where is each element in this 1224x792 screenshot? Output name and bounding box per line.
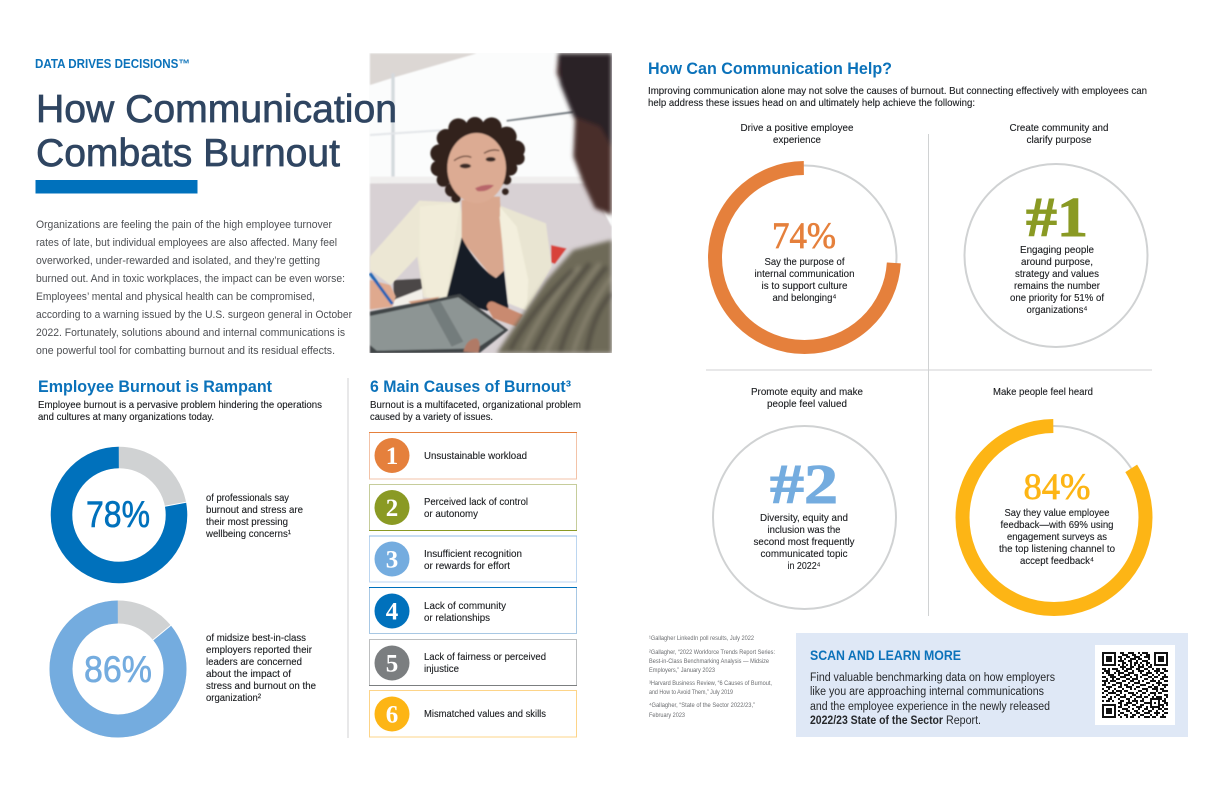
quadrant: community and purpose: one priority for 51% of bbox=[1010, 292, 1104, 304]
callout text: Report. bbox=[946, 715, 981, 727]
burnout subtext: Employee burnout is a pervasive problem hindering the operations bbox=[38, 399, 322, 411]
callout heading: SCAN AND LEARN MORE bbox=[810, 648, 961, 663]
quadrant: community and purpose: organizations⁴ bbox=[1026, 304, 1088, 316]
footnotes: Employers,” January 2023 bbox=[649, 667, 715, 674]
intro paragraph: 2022. Fortunately, solutions abound and internal communications is bbox=[36, 327, 345, 339]
causes subtext: Burnout is a multifaceted, organizational problem bbox=[370, 399, 581, 411]
quadrant: feel heard: the top listening channel to bbox=[999, 543, 1115, 555]
cause 2 bbox=[369, 484, 577, 530]
donut chart: 86% bbox=[61, 612, 175, 726]
quadrant: feel heard: Say they value employee bbox=[1004, 507, 1110, 519]
stat text: 86%: organization² bbox=[206, 692, 261, 704]
cause 3 bbox=[369, 536, 577, 582]
quadrant: feel heard: feedback—with 69% using bbox=[1000, 519, 1114, 531]
cause 5: Lack of fairness or perceived bbox=[424, 651, 546, 663]
quadrant: positive employee experience: and belonging⁴ bbox=[772, 292, 836, 304]
quadrant: positive employee experience: Drive a positive employee bbox=[740, 122, 854, 134]
quadrant: equity: inclusion was the bbox=[768, 524, 841, 536]
title bbox=[36, 88, 397, 175]
donut chart: 78% bbox=[62, 458, 188, 572]
stat text: 78%: wellbeing concerns¹ bbox=[205, 528, 291, 540]
cause 6: Mismatched values and skills bbox=[424, 708, 546, 720]
quadrant: equity: communicated topic bbox=[760, 548, 848, 560]
cause 2: or autonomy bbox=[424, 508, 479, 520]
intro paragraph: burned out. And in toxic workplaces, the impact can be even worse: bbox=[36, 273, 345, 285]
quadrant: community and purpose: #1 bbox=[1026, 187, 1088, 249]
footnotes: ¹Gallagher LinkedIn poll results, July 2022 bbox=[649, 635, 754, 642]
stat text: 78% bbox=[205, 492, 303, 540]
intro paragraph: according to a warning issued by the U.S. surgeon general in October bbox=[36, 309, 352, 321]
heading: 6 Main Causes of Burnout: 6 Main Causes of Burnout³ bbox=[370, 377, 571, 396]
quadrant: feel heard: Make people feel heard bbox=[993, 386, 1093, 398]
quadrant: equity: #2 bbox=[770, 454, 838, 516]
cause 1: 1 bbox=[386, 443, 398, 470]
quadrant: equity: people feel valued bbox=[767, 398, 847, 410]
cause 4 bbox=[369, 588, 577, 634]
quadrant: community and purpose: remains the number bbox=[1014, 280, 1100, 292]
donut chart: 78%: 78% bbox=[86, 494, 150, 535]
intro paragraph: one powerful tool for combatting burnout and its residual effects. bbox=[36, 345, 335, 357]
intro paragraph: overworked, under-rewarded and isolated, and they’re getting bbox=[36, 255, 320, 267]
cause 1 bbox=[369, 432, 577, 479]
eyebrow: Data Drives Decisions: DATA DRIVES DECISIONS™ bbox=[35, 57, 190, 71]
callout text: Find valuable benchmarking data on how employers bbox=[810, 672, 1055, 684]
stat text: 86%: about the impact of bbox=[206, 668, 291, 680]
title: How Communication bbox=[36, 88, 397, 131]
quadrant: community and purpose: strategy and values bbox=[1015, 268, 1099, 280]
donut chart: 86%: 86% bbox=[84, 649, 152, 690]
heading: Employee Burnout is Rampant: Employee Burnout is Rampant bbox=[38, 377, 272, 396]
quadrant: community and purpose: Engaging people bbox=[1020, 244, 1094, 256]
stat text: 78%: of professionals say bbox=[206, 492, 290, 504]
quadrant: equity: second most frequently bbox=[754, 536, 855, 548]
stat text: 86%: stress and burnout on the bbox=[206, 680, 316, 692]
cause 6 bbox=[370, 690, 576, 737]
heading: How Can Communication Help?: How Can Communication Help? bbox=[648, 59, 892, 78]
title: Combats Burnout bbox=[36, 132, 340, 175]
right column intro bbox=[648, 85, 1147, 109]
cause 5: injustice bbox=[424, 663, 459, 675]
quadrant: community and purpose bbox=[964, 122, 1148, 347]
footnotes: ²Gallagher, “2022 Workforce Trends Report Series: bbox=[649, 649, 775, 656]
causes subtext: caused by a variety of issues. bbox=[370, 411, 493, 423]
photo: woman in meeting with colleague bbox=[369, 53, 612, 353]
right column intro: help address these issues head on and ultimately help achieve the following: bbox=[648, 97, 975, 109]
stat text: 86% bbox=[206, 632, 316, 704]
ring: #2 bbox=[713, 426, 896, 609]
quadrant: positive employee experience: internal communication bbox=[754, 268, 855, 280]
cause 6: 6 bbox=[386, 702, 398, 728]
stat text: 86%: of midsize best-in-class bbox=[206, 632, 306, 644]
cause 3: or rewards for effort bbox=[424, 560, 510, 572]
quadrant: positive employee experience: 74% bbox=[772, 216, 836, 257]
quadrant: feel heard: engagement surveys as bbox=[1007, 531, 1107, 543]
cause 4: Lack of community bbox=[424, 600, 507, 612]
quadrant: community and purpose: around purpose, bbox=[1021, 256, 1093, 268]
QR code bbox=[1095, 645, 1175, 725]
cause 2: Perceived lack of control bbox=[424, 496, 528, 508]
quadrant: community and purpose: clarify purpose bbox=[1026, 134, 1092, 146]
footnotes bbox=[649, 635, 775, 719]
burnout subtext: and cultures at many organizations today. bbox=[38, 411, 214, 423]
ring: #1 bbox=[964, 164, 1148, 347]
causes subtext bbox=[370, 399, 581, 423]
footnotes: and How to Avoid Them,” July 2019 bbox=[649, 689, 733, 696]
tablet bbox=[370, 294, 508, 353]
callout text bbox=[810, 672, 1055, 727]
quadrant: feel heard: accept feedback⁴ bbox=[1020, 555, 1094, 567]
cause 3: 3 bbox=[386, 546, 398, 574]
intro paragraph bbox=[36, 219, 352, 357]
stat text: 78%: burnout and stress are bbox=[206, 504, 303, 516]
intro paragraph: rates of late, but individual employees are also affected. Many feel bbox=[36, 237, 337, 249]
quadrant: positive employee experience: is to support culture bbox=[762, 280, 848, 292]
quadrant: equity: Diversity, equity and bbox=[760, 512, 848, 524]
cause 4: or relationships bbox=[424, 612, 490, 624]
intro paragraph: Organizations are feeling the pain of the high employee turnover bbox=[36, 219, 332, 231]
woman bbox=[370, 201, 466, 298]
quadrant: feel heard: 84% bbox=[1024, 467, 1090, 508]
cause 4: 4 bbox=[386, 598, 399, 626]
stat text: 78%: their most pressing bbox=[206, 516, 288, 528]
ring chart: 84% bbox=[962, 426, 1146, 609]
intro paragraph: Employees’ mental and physical health can be compromised, bbox=[36, 291, 315, 303]
quadrant: equity: in 2022⁴ bbox=[788, 560, 820, 572]
quadrant: positive employee experience bbox=[712, 122, 896, 350]
cause 3: Insufficient recognition bbox=[424, 548, 522, 560]
quadrant: community and purpose: Create community and bbox=[1010, 122, 1109, 134]
stat text: 86%: leaders are concerned bbox=[206, 656, 302, 668]
quadrant: positive employee experience: Say the purpose of bbox=[764, 256, 845, 268]
footnotes: February 2023 bbox=[649, 712, 685, 719]
panel: scan and learn more bbox=[796, 633, 1188, 737]
cause 1: Unsustainable workload bbox=[424, 450, 527, 462]
footnotes: ³Harvard Business Review, “6 Causes of Burnout, bbox=[649, 680, 772, 687]
callout text: like you are approaching internal communications bbox=[810, 686, 1044, 698]
quadrant: equity: Promote equity and make bbox=[751, 386, 863, 398]
callout text: 2022/23 State of the Sector bbox=[810, 715, 943, 727]
footnotes: Best-in-Class Benchmarking Analysis — Midsize bbox=[649, 658, 769, 665]
stat text: 86%: employers reported their bbox=[206, 644, 312, 656]
foreground person bbox=[557, 53, 612, 215]
cause 5 bbox=[369, 640, 577, 686]
title accent bar bbox=[36, 180, 198, 194]
right column intro: Improving communication alone may not solve the causes of burnout. But connecting effectively with employees can bbox=[648, 85, 1147, 97]
cause 2: 2 bbox=[386, 495, 398, 522]
callout text: and the employee experience in the newly released bbox=[810, 701, 1050, 713]
burnout subtext bbox=[38, 399, 322, 423]
ring chart: 74% bbox=[712, 166, 896, 350]
quadrant: equity bbox=[713, 386, 896, 609]
quadrant: feel heard bbox=[962, 386, 1146, 609]
footnotes: ⁴Gallagher, “State of the Sector 2022/23,” bbox=[649, 702, 755, 709]
quadrant: positive employee experience: experience bbox=[773, 134, 821, 146]
cause 5: 5 bbox=[386, 650, 398, 678]
